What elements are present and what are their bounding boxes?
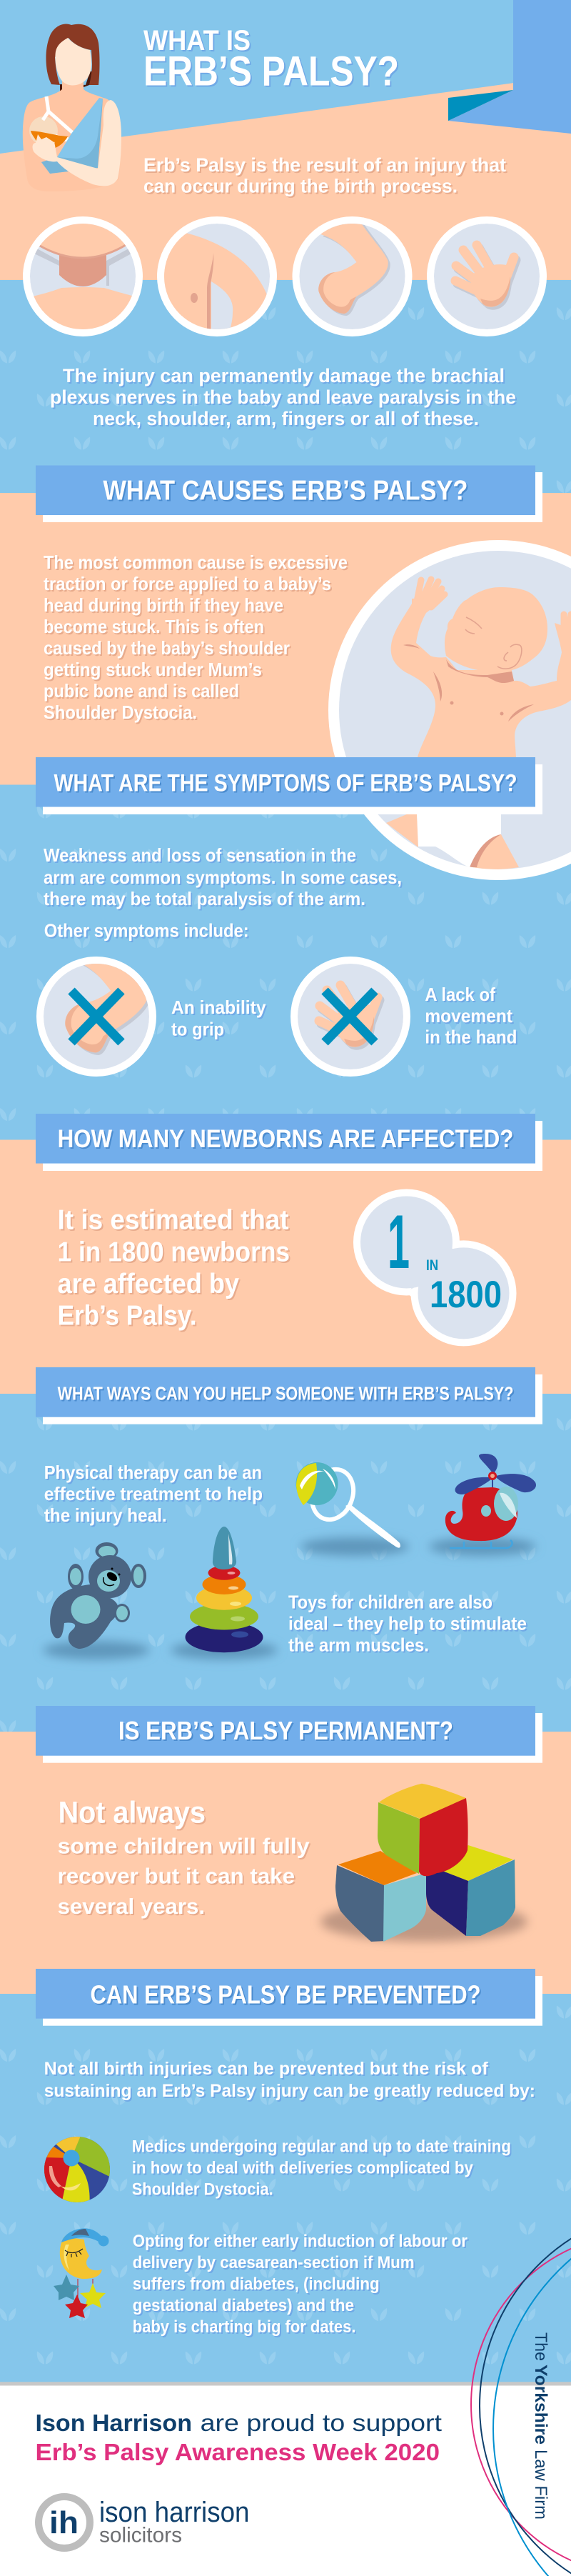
footer panel <box>0 2382 571 2576</box>
causes text: pubic bone and is called <box>44 680 239 702</box>
prevention intro text: sustaining an Erb’s Palsy injury can be greatly reduced by: <box>44 2081 535 2101</box>
heading: permanent: IS ERB’S PALSY PERMANENT? <box>118 1716 453 1745</box>
symptom: movement <box>425 984 517 1048</box>
symptoms text: arm are common symptoms. In some cases, <box>44 867 402 888</box>
vertical tagline: Law Firm <box>531 2450 550 2520</box>
symptom: movement: in the hand <box>425 1027 517 1048</box>
physical therapy text <box>44 1462 263 1526</box>
injury text <box>50 365 516 429</box>
induction text: gestational diabetes) and the <box>133 2296 354 2315</box>
logo: ison harrison solicitors <box>39 2497 250 2548</box>
vertical tagline: The <box>531 2332 550 2361</box>
support statement <box>36 2410 442 2465</box>
icon: open hand <box>427 216 547 336</box>
support statement: Ison Harrison <box>36 2410 192 2436</box>
logo: ison harrison solicitors: solicitors <box>99 2524 182 2547</box>
causes text: become stuck. This is often <box>44 616 264 637</box>
icon: ring stacker <box>171 1527 278 1659</box>
icon: beach ball <box>44 2137 110 2202</box>
decorative arcs <box>471 2205 571 2576</box>
causes text: head during birth if they have <box>44 594 283 616</box>
induction text <box>133 2232 468 2337</box>
support statement: are proud to support <box>201 2410 442 2436</box>
heading: newborns: HOW MANY NEWBORNS ARE AFFECTED? <box>58 1125 513 1153</box>
symptom: grip <box>171 997 266 1040</box>
symptom: movement: movement <box>425 1005 512 1027</box>
permanent text: several years. <box>58 1894 205 1919</box>
symptom: grip: to grip <box>171 1019 224 1040</box>
causes text: caused by the baby’s shoulder <box>44 637 290 659</box>
symptom: movement: A lack of <box>425 984 495 1005</box>
title <box>143 25 399 94</box>
badge: 1 in 1800: IN <box>426 1257 438 1274</box>
heading: prevented <box>36 1969 542 2026</box>
icon: bent arm <box>293 216 413 336</box>
icon: crossed fist <box>36 957 156 1077</box>
induction text: Opting for either early induction of labour or <box>133 2232 468 2251</box>
illustration: sleeping baby in circle <box>328 540 571 880</box>
toys text: Toys for children are also <box>288 1592 492 1613</box>
intro text: Erb’s Palsy is the result of an injury that <box>143 154 506 176</box>
toys text: ideal – they help to stimulate <box>288 1613 527 1634</box>
medics text <box>132 2137 511 2199</box>
symptoms text: there may be total paralysis of the arm. <box>44 888 365 909</box>
permanent text: some children will fully <box>58 1833 310 1858</box>
icon: crossed hand <box>290 957 410 1077</box>
permanent text <box>58 1796 310 1919</box>
induction text: delivery by caesarean-section if Mum <box>133 2253 415 2272</box>
prevention intro text: Not all birth injuries can be prevented but the risk of <box>44 2059 488 2079</box>
heading: what causes: WHAT CAUSES ERB’S PALSY? <box>103 476 468 506</box>
heading: newborns <box>36 1114 542 1171</box>
icon: neck <box>23 216 143 336</box>
badge: 1 in 1800: 1800 <box>430 1274 502 1316</box>
illustration: building blocks <box>320 1784 527 1942</box>
logo: ison harrison solicitors: ih <box>49 2505 79 2540</box>
toys text <box>288 1592 527 1656</box>
intro text: can occur during the birth process. <box>143 176 458 197</box>
causes text <box>44 551 348 723</box>
physical therapy text: the injury heal. <box>44 1504 167 1526</box>
physical therapy text: Physical therapy can be an <box>44 1462 262 1483</box>
statistic text: are affected by <box>58 1269 239 1299</box>
symptoms text: Weakness and loss of sensation in the <box>44 844 356 866</box>
prevention intro text <box>44 2059 535 2101</box>
statistic text: It is estimated that <box>58 1205 289 1236</box>
causes text: traction or force applied to a baby’s <box>44 573 331 594</box>
injury text: neck, shoulder, arm, fingers or all of these. <box>93 408 479 429</box>
permanent text: Not always <box>59 1796 206 1830</box>
heading: permanent <box>36 1706 542 1763</box>
logo: ison harrison solicitors: ison harrison <box>99 2497 250 2528</box>
causes text: Shoulder Dystocia. <box>44 702 197 723</box>
badge: 1 in 1800: 1 <box>388 1199 410 1284</box>
icon: shoulder <box>157 216 277 341</box>
statistic text: 1 in 1800 newborns <box>58 1237 290 1267</box>
causes text: getting stuck under Mum’s <box>44 659 262 680</box>
symptoms text <box>44 844 402 942</box>
physical therapy text: effective treatment to help <box>44 1483 263 1504</box>
ribbon <box>448 0 571 134</box>
induction text: baby is charting big for dates. <box>133 2317 355 2337</box>
causes text: The most common cause is excessive <box>44 551 348 573</box>
support statement: Erb’s Palsy Awareness Week 2020 <box>36 2439 440 2465</box>
symptoms text: Other symptoms include: <box>44 920 249 942</box>
intro text <box>143 154 506 197</box>
symptom: grip: An inability <box>171 997 266 1018</box>
heading: symptoms <box>36 757 542 814</box>
statistic text <box>58 1205 290 1332</box>
title: WHAT IS <box>143 25 251 56</box>
medics text: Medics undergoing regular and up to date training <box>132 2137 511 2156</box>
heading: prevented: CAN ERB’S PALSY BE PREVENTED? <box>90 1980 481 2009</box>
induction text: suffers from diabetes, (including <box>133 2275 380 2294</box>
permanent text: recover but it can take <box>58 1864 295 1889</box>
medics text: Shoulder Dystocia. <box>132 2180 273 2199</box>
medics text: in how to deal with deliveries complicated by <box>132 2158 474 2177</box>
vertical tagline <box>531 2332 550 2520</box>
icon: sleeping moon with stars <box>54 2228 108 2318</box>
illustration: mother with baby in sling <box>23 24 121 191</box>
vertical tagline: Yorkshire <box>531 2365 550 2445</box>
heading: what causes <box>36 466 542 522</box>
icon: teddy bear <box>43 1542 150 1659</box>
injury text: plexus nerves in the baby and leave paralysis in the <box>50 386 516 408</box>
statistic text: Erb’s Palsy. <box>58 1301 197 1332</box>
icon: rattle <box>295 1462 409 1556</box>
toys text: the arm muscles. <box>288 1634 429 1656</box>
icon: toy helicopter <box>429 1454 536 1556</box>
badge: 1 in 1800 <box>353 1189 517 1346</box>
title: ERB’S PALSY? <box>143 49 399 94</box>
injury text: The injury can permanently damage the brachial <box>63 365 505 386</box>
heading: help <box>36 1367 542 1424</box>
